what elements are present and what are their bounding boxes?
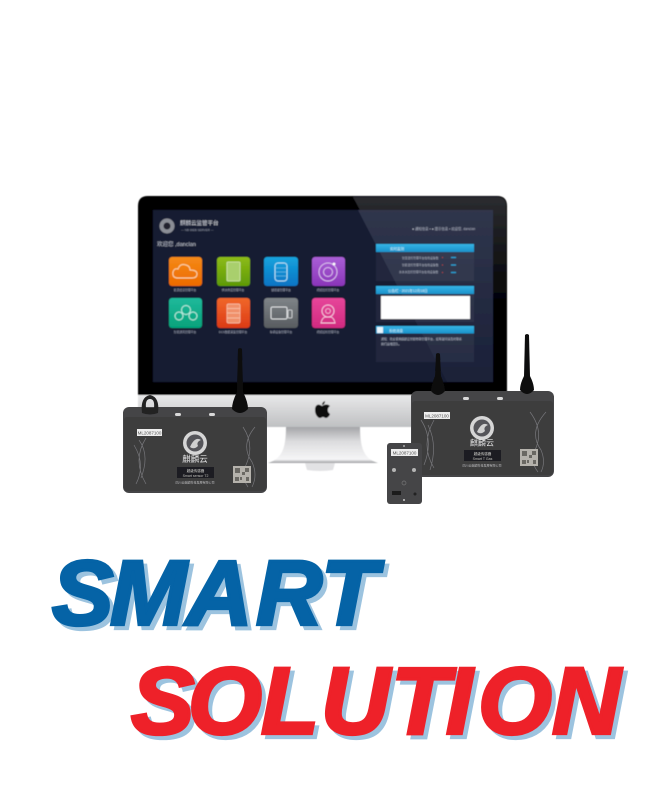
- icon labels: 视频监控管理平台: [317, 288, 339, 292]
- icon labels: 能源经营管理平台: [174, 288, 196, 292]
- QR code: [520, 449, 538, 466]
- asset label: ML2087100: [393, 450, 417, 456]
- icon: webcam: [312, 298, 345, 328]
- icon: target ring: [312, 257, 345, 286]
- icon: antenna left: [431, 353, 445, 395]
- device: small sensor: [387, 443, 422, 504]
- title: SMART: SMART: [56, 546, 388, 648]
- title: SOLUTION: SOLUTION: [131, 648, 623, 754]
- app header: 麒麟云监管平台: [180, 219, 219, 227]
- icon labels: 智能通风管理平台: [174, 330, 196, 334]
- monitor chin: [138, 392, 507, 427]
- asset label: [424, 412, 450, 419]
- asset label: ML2087100: [138, 430, 162, 436]
- icon labels: 车辆设备管理平台: [270, 330, 292, 334]
- panel: status: 水水水监控管理平台在线设备数: [399, 270, 438, 274]
- title: SMART: SMART: [52, 542, 384, 644]
- device: left gateway: [123, 348, 267, 493]
- asset label: ML2087100: [425, 414, 449, 418]
- icon: grid panel: [217, 257, 250, 286]
- panel: chart: [376, 286, 474, 322]
- model plate: [177, 467, 214, 478]
- model plate: 超级传感器: [187, 468, 205, 473]
- model plate: Smart T Gas: [473, 457, 493, 461]
- icon: lanyard ring: [142, 395, 158, 414]
- logo emblem: [183, 431, 207, 455]
- app icon grid: [169, 257, 345, 334]
- monitor bezel: [138, 196, 507, 395]
- panel: chart: 公告栏 · 2021年12月18日: [388, 288, 428, 293]
- model plate: Smart sensor T2: [183, 474, 208, 478]
- logo emblem: [470, 416, 494, 440]
- app header: [157, 218, 475, 248]
- icon: server stack: [217, 298, 250, 328]
- manufacturer line: 四川云麒麟科技发展有限公司: [462, 462, 502, 468]
- panel: status: 智能监控管理平台在线设备数: [402, 263, 439, 267]
- panel: notice: 系统消息: [389, 328, 403, 333]
- model plate: 超级传感器: [474, 451, 492, 456]
- panel: notice: 我们运维团队。: [381, 341, 401, 346]
- wave pattern: [421, 412, 546, 472]
- icon: apple logo: [315, 401, 330, 418]
- icon: antenna: [232, 348, 248, 413]
- icon: antenna right: [520, 334, 534, 394]
- icon: cylinder: [264, 257, 298, 286]
- monitor stand: [268, 427, 378, 471]
- brand name: 麒麟云: [182, 454, 208, 464]
- app header: 欢迎您 ,danclan: [157, 240, 196, 248]
- device: right gateway: [411, 334, 554, 477]
- icon labels: 储能罐管理平台: [271, 288, 291, 292]
- panel: status: 智慧监控管理平台在线设备数: [402, 256, 439, 260]
- app header: ● 通知信息 ▪ ● 提示信息 ▪ 欢迎您, danclan: [412, 226, 475, 231]
- manufacturer line: 四川云麒麟科技发展有限公司: [175, 480, 215, 484]
- title: SOLUTION: SOLUTION: [135, 652, 627, 758]
- icon labels: 供水供应管理平台: [222, 288, 244, 292]
- sensor controls: [392, 445, 416, 501]
- icon labels: DCS数据采集管理平台: [219, 330, 247, 334]
- screen: [153, 210, 493, 382]
- desktop monitor: [138, 196, 507, 471]
- model plate: [464, 450, 501, 461]
- icon: cloud: [169, 257, 202, 286]
- QR code: [233, 466, 251, 483]
- app header: — NB WEB SERVER —: [181, 228, 214, 232]
- wave pattern: [134, 427, 255, 487]
- icon: fan: [169, 298, 202, 328]
- icon labels: 视频巡检管理平台: [317, 330, 339, 334]
- icon: screen and device: [264, 298, 298, 328]
- asset label: [137, 429, 162, 436]
- panel: notice: [376, 326, 474, 362]
- icon labels: [174, 288, 339, 334]
- brand name: 麒麟云: [470, 438, 494, 448]
- panel: status: 实时监测: [390, 246, 404, 251]
- panel: notice: 通知：欢迎使用麒麟云智能物联管理平台，如有疑问请及时联系: [381, 336, 462, 341]
- panel: status: [376, 244, 474, 281]
